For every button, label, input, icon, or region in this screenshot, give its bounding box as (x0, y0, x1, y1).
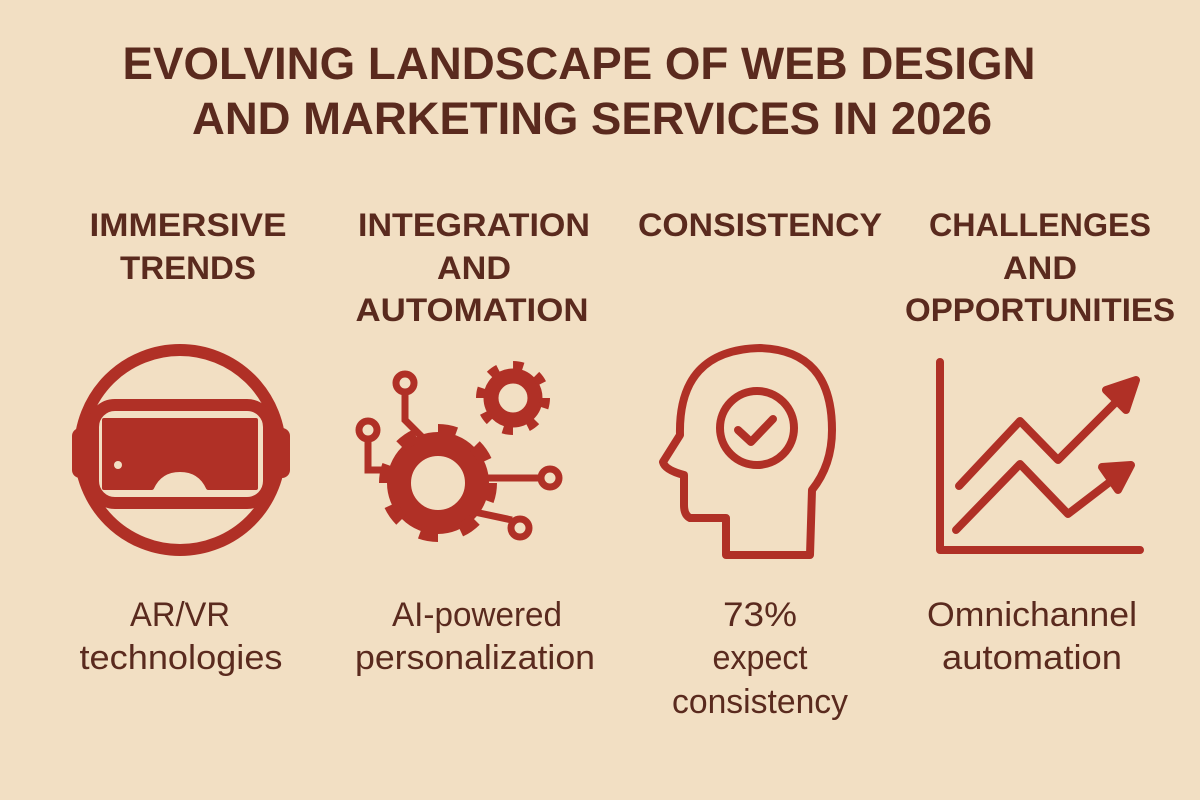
icon: head with check (663, 348, 832, 555)
captions: 73% (723, 596, 797, 634)
column headings: OPPORTUNITIES (905, 292, 1175, 328)
column headings (90, 207, 1175, 328)
captions: AI-powered (392, 596, 562, 634)
icon: growth chart (940, 362, 1140, 550)
column headings: AND (437, 250, 511, 286)
captions: personalization (355, 639, 595, 677)
column headings: CONSISTENCY (638, 207, 882, 243)
captions: technologies (80, 639, 282, 677)
column headings: TRENDS (120, 250, 256, 286)
captions: consistency (672, 683, 848, 721)
column headings: AUTOMATION (356, 292, 588, 328)
captions (80, 596, 1137, 721)
captions: expect (712, 639, 808, 677)
title: AND MARKETING SERVICES IN 2026 (192, 93, 992, 144)
captions: automation (942, 639, 1122, 677)
title (122, 38, 1036, 144)
column headings: CHALLENGES (929, 207, 1151, 243)
captions: Omnichannel (927, 596, 1137, 634)
title: EVOLVING LANDSCAPE OF WEB DESIGN (122, 38, 1036, 89)
column headings: IMMERSIVE (90, 207, 286, 243)
icon: gears with circuit (359, 366, 559, 537)
icon: VR headset (72, 350, 290, 550)
column headings: INTEGRATION (358, 207, 590, 243)
captions: AR/VR (130, 596, 230, 634)
column headings: AND (1003, 250, 1077, 286)
